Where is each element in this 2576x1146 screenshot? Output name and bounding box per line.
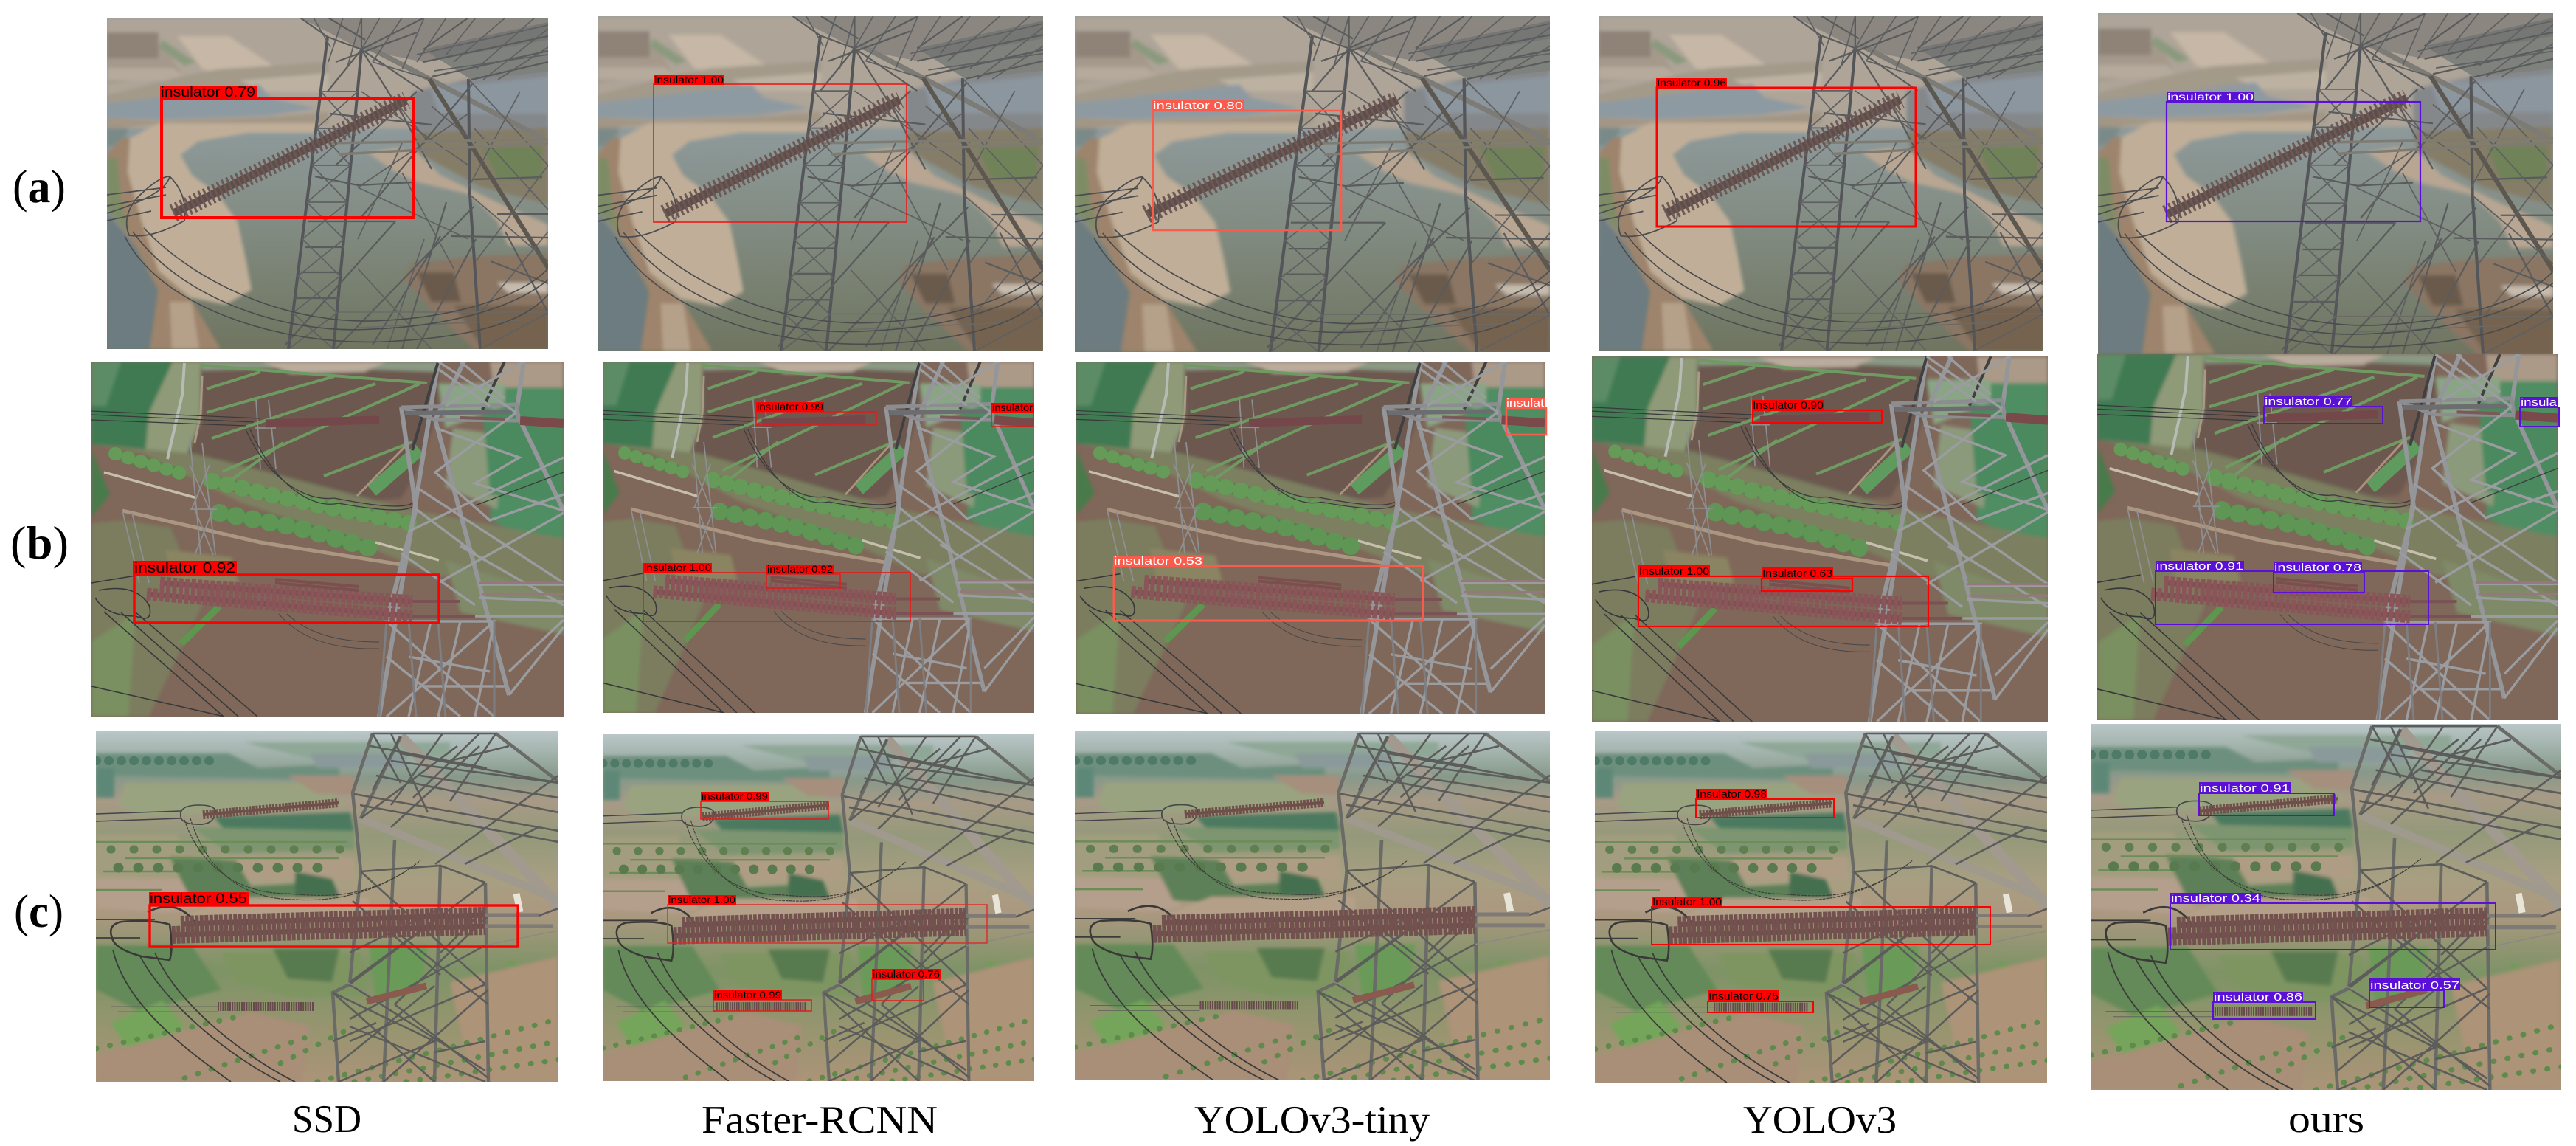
detection box: insulator 0.57: insulator 0.57 xyxy=(2370,979,2459,992)
detection box: insulator 0.86: insulator 0.86 xyxy=(2214,991,2302,1004)
detection box: insulator 0.92: insulator 0.92 xyxy=(134,560,235,576)
detection box: insulator 0.34 xyxy=(2170,892,2496,950)
detection box: insulator 0.99 top xyxy=(701,790,828,819)
detection box: Insulator 1.00 xyxy=(1638,565,1928,626)
row label: (a): (a) xyxy=(13,161,66,213)
detection box: insulator 0.80 xyxy=(1152,100,1341,230)
detection box: insulator 0.92 xyxy=(766,563,840,588)
detection box: insulator 0.53 xyxy=(1113,555,1423,621)
detection box: insulator 0.99 xyxy=(756,401,876,425)
panel: row c Faster-RCNN xyxy=(603,734,1034,1081)
detection box: insulator 0.99 bottom xyxy=(713,989,811,1011)
detection box: insulator 1.00 xyxy=(2167,91,2420,221)
detection box: Insulator 0.75 xyxy=(1708,990,1813,1012)
column label: YOLOv3: YOLOv3 xyxy=(1743,1099,1897,1142)
detection box: insulator 1.00: insulator 1.00 xyxy=(644,562,711,573)
detection box: insulator 0.92: insulator 0.92 xyxy=(767,563,833,575)
panel: row c ours xyxy=(2091,724,2561,1090)
detection box: insulat clipped: insulat xyxy=(1506,397,1545,410)
panel: row a Faster-RCNN xyxy=(598,16,1043,351)
detection box: Insulator 0.90 xyxy=(1752,399,1882,423)
detection box: insulator 0.99: insulator 0.99 xyxy=(757,401,823,413)
detection box: insulator 0.78 xyxy=(2274,562,2364,593)
detection box: insulator 0.91: insulator 0.91 xyxy=(2200,782,2290,795)
detection box: insulator 1.00: insulator 1.00 xyxy=(654,74,724,86)
row label: (c): (c) xyxy=(14,886,63,937)
detection box: Insulator 1.00: Insulator 1.00 xyxy=(1652,896,1722,908)
detection box: insulator 0.77: insulator 0.77 xyxy=(2265,396,2352,408)
detection box: insulator 1.00 xyxy=(654,74,907,222)
column label: SSD: SSD xyxy=(292,1098,361,1141)
detection box: Insulator 0.90: Insulator 0.90 xyxy=(1753,399,1824,412)
detection box: insulator 1.00: insulator 1.00 xyxy=(668,894,735,905)
detection box: insulator clipped xyxy=(991,401,1034,427)
detection box: insulator 0.79 xyxy=(160,85,413,218)
detection box: insulator 0.76 xyxy=(872,968,941,1001)
detection box: insulator 0.55 xyxy=(149,891,518,947)
detection box: Insulator 0.63 xyxy=(1762,567,1852,591)
detection box: insula clipped xyxy=(2520,396,2559,427)
detection box: insulator 1.00 xyxy=(668,894,987,943)
column label: YOLOv3-tiny: YOLOv3-tiny xyxy=(1194,1099,1430,1142)
detection box: insulator 0.53: insulator 0.53 xyxy=(1114,555,1202,567)
panel: row b Faster-RCNN xyxy=(603,362,1034,713)
detection box: insulator 0.79: insulator 0.79 xyxy=(161,85,255,100)
detection box: insulator 0.57 xyxy=(2369,978,2460,1007)
detection box: Insulator 0.96: Insulator 0.96 xyxy=(1657,77,1726,89)
detection box: Insulator 0.96 xyxy=(1656,77,1916,227)
detection box: insulator 0.86 xyxy=(2213,991,2316,1019)
column label: ours: ours xyxy=(2288,1098,2364,1141)
detection box: insulator 0.80: insulator 0.80 xyxy=(1153,100,1243,112)
panel: row b SSD xyxy=(91,362,564,717)
detection box: insulator 0.91 xyxy=(2199,782,2334,815)
detection box: Insulator 0.75: Insulator 0.75 xyxy=(1708,990,1779,1003)
detection box: Insulator 0.98 xyxy=(1696,788,1834,818)
panel: row a ours xyxy=(2098,13,2553,354)
detection box: insulator 0.77 xyxy=(2264,396,2383,424)
detection box: insulator 1.00: insulator 1.00 xyxy=(2167,91,2254,103)
detection box: Insulator 1.00: Insulator 1.00 xyxy=(1639,565,1709,578)
panel: row a YOLOv3 xyxy=(1599,16,2043,351)
detection box: insulator 0.99 top: insulator 0.99 xyxy=(702,790,768,802)
panel: row c YOLOv3-tiny xyxy=(1075,731,1550,1080)
detection box: insula clipped: insula xyxy=(2521,396,2558,409)
detection box: insulator 0.99 bottom: insulator 0.99 xyxy=(714,989,781,1001)
detection box: insulat clipped xyxy=(1506,397,1546,435)
panel: row c YOLOv3 xyxy=(1595,731,2047,1083)
detection box: insulator clipped: insulator xyxy=(992,401,1033,413)
panel: row c SSD xyxy=(96,731,558,1082)
detection box: insulator 0.34: insulator 0.34 xyxy=(2171,892,2260,905)
detection box: insulator 0.92 xyxy=(133,560,439,623)
detection box: Insulator 1.00 xyxy=(1652,896,1990,945)
row label: (b): (b) xyxy=(10,517,69,569)
detection box: insulator 0.91: insulator 0.91 xyxy=(2156,560,2243,573)
panel: row b YOLOv3-tiny xyxy=(1076,362,1546,714)
detection box: insulator 1.00 xyxy=(643,562,910,621)
detection box: insulator 0.78: insulator 0.78 xyxy=(2274,562,2361,574)
column label: Faster-RCNN: Faster-RCNN xyxy=(702,1099,938,1142)
detection box: insulator 0.91 xyxy=(2156,560,2428,624)
detection box: Insulator 0.98: Insulator 0.98 xyxy=(1697,788,1767,801)
detection box: Insulator 0.63: Insulator 0.63 xyxy=(1762,567,1832,580)
panel: row b ours xyxy=(2097,354,2559,720)
panel: row b YOLOv3 xyxy=(1592,356,2048,722)
detection box: insulator 0.76: insulator 0.76 xyxy=(873,968,940,980)
detection box: insulator 0.55: insulator 0.55 xyxy=(150,891,247,907)
panel: row a SSD xyxy=(107,18,548,349)
panel: row a YOLOv3-tiny xyxy=(1075,16,1550,352)
